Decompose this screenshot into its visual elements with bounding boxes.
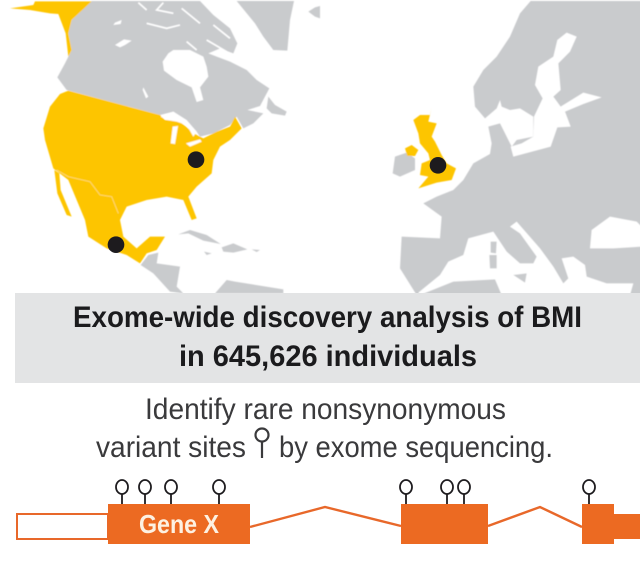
Greenland bbox=[237, 1, 294, 51]
Mediterranean islands bbox=[489, 242, 527, 283]
map: North America bbox=[10, 1, 320, 293]
land: Canada and Arctic bbox=[57, 1, 269, 137]
Arctic channels bbox=[138, 3, 230, 52]
Iceland edge bbox=[308, 6, 320, 18]
Hudson Bay bbox=[163, 50, 208, 102]
exon label: Gene X bbox=[139, 509, 220, 539]
description line 1: Identify rare nonsynonymous bbox=[145, 393, 506, 426]
Great Bear and Slave lakes bbox=[113, 20, 148, 98]
Black Sea bbox=[590, 217, 640, 248]
Ireland bbox=[393, 153, 415, 177]
icon: variant pin bbox=[256, 428, 268, 458]
gene diagram bbox=[17, 480, 640, 544]
Gulf of Bothnia and Baltic Sea bbox=[511, 33, 602, 157]
exon 3 bbox=[582, 504, 640, 544]
description line 2 bbox=[96, 428, 553, 464]
Northern Ireland bbox=[405, 145, 418, 156]
Alaska bbox=[10, 1, 92, 57]
intron lines bbox=[250, 507, 582, 527]
marker: Mexico bbox=[108, 236, 124, 253]
Central America bbox=[141, 253, 183, 293]
Eurasia land bbox=[400, 1, 640, 295]
South America bbox=[215, 280, 283, 293]
title panel bbox=[15, 293, 640, 383]
US-Mexico border bbox=[57, 170, 118, 213]
exon 2 bbox=[401, 504, 488, 544]
UK bbox=[413, 107, 456, 188]
title line 2: in 645,626 individuals bbox=[179, 340, 477, 373]
marker: UK bbox=[430, 157, 446, 174]
title line 1: Exome-wide discovery analysis of BMI bbox=[73, 301, 582, 334]
marker: US bbox=[188, 151, 204, 168]
Great Lakes bbox=[161, 112, 202, 147]
exon 1 bbox=[108, 504, 250, 544]
description line 2: variant sites bbox=[96, 431, 246, 464]
Mediterranean bbox=[418, 222, 633, 295]
untranslated region bbox=[17, 514, 108, 539]
variant pins bbox=[116, 480, 595, 504]
USA and Mexico bbox=[43, 91, 242, 263]
Newfoundland bbox=[267, 97, 287, 116]
map: Europe bbox=[393, 1, 640, 295]
Baja California bbox=[54, 170, 72, 217]
description line 2: by exome sequencing. bbox=[279, 431, 553, 464]
Caribbean islands bbox=[178, 230, 260, 255]
